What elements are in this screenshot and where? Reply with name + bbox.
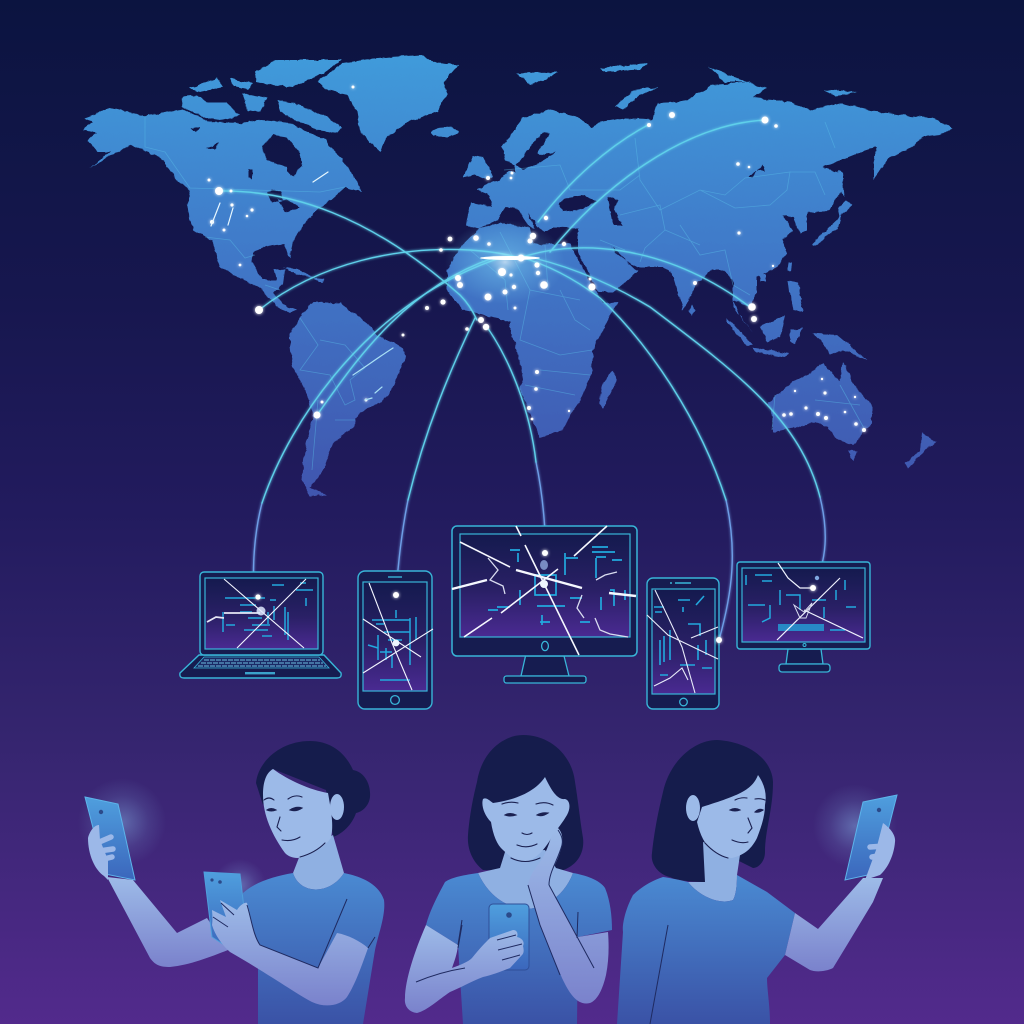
held phone — [489, 904, 529, 970]
phone glow — [78, 778, 166, 866]
monitor impact point — [540, 580, 548, 588]
neck and chest — [478, 850, 573, 909]
monitor frame — [737, 562, 870, 649]
ear — [686, 795, 700, 821]
monitor base — [779, 664, 830, 672]
monitor pale node — [540, 560, 548, 570]
phone screen cracks — [363, 583, 433, 690]
monitor secondary node — [815, 576, 819, 580]
monitor screen cracks — [460, 526, 607, 655]
Arctic islands — [182, 60, 342, 153]
right phone — [845, 795, 897, 880]
laptop wiggly line — [207, 613, 260, 622]
laptop base — [180, 655, 341, 678]
hand on right phone — [865, 823, 895, 880]
monitor thick cracks — [452, 570, 636, 596]
hand and arm outlines — [416, 925, 522, 982]
center phone — [204, 872, 245, 950]
phone impact point — [393, 640, 399, 646]
neck — [688, 842, 740, 901]
face — [263, 769, 332, 858]
person: woman looking at phone — [617, 740, 897, 1024]
device: central monitor — [452, 526, 637, 683]
Australia — [768, 362, 872, 445]
shirt — [240, 873, 384, 1024]
center phone cameras — [210, 878, 222, 884]
Africa — [447, 223, 618, 437]
monitor screen — [742, 568, 865, 642]
laptop screen — [205, 578, 318, 649]
monitor node — [542, 550, 548, 556]
Tasmania and New Zealand — [848, 432, 935, 468]
facial features — [502, 802, 553, 862]
monitor screen data marks — [746, 575, 856, 630]
ear — [330, 794, 344, 820]
phone home button — [680, 698, 687, 706]
phone speaker — [388, 576, 402, 578]
back hair — [468, 735, 583, 872]
face — [697, 775, 766, 858]
person: woman with two phones — [78, 741, 384, 1024]
Pacific and Asian islands — [689, 170, 867, 360]
neck — [293, 835, 344, 890]
monitor stand — [786, 649, 823, 664]
land masses — [83, 55, 952, 497]
phone screen cracks — [647, 590, 718, 693]
facial features — [264, 796, 325, 857]
center phone glow — [214, 859, 266, 911]
monitor data block — [778, 624, 824, 631]
monitor node — [810, 585, 816, 591]
laptop keyboard — [194, 657, 329, 668]
monitor wiggly lines — [488, 558, 628, 637]
monitor heart shaped line — [794, 603, 812, 618]
device: laptop — [180, 572, 341, 678]
phone screen data marks — [654, 596, 712, 675]
left arm and hand — [405, 925, 524, 1013]
arcs to devices — [253, 462, 825, 640]
phone glow — [813, 784, 897, 868]
face — [482, 777, 569, 862]
phone speaker — [670, 582, 691, 584]
person: woman with hand on cheek — [405, 735, 612, 1024]
laptop trackpad — [245, 672, 275, 674]
devices row — [180, 526, 870, 709]
United Kingdom and Ireland — [463, 155, 493, 180]
phone body — [358, 571, 432, 709]
world map — [83, 55, 952, 640]
laptop lid — [200, 572, 323, 655]
device: right monitor — [737, 562, 870, 672]
Madagascar — [599, 370, 617, 408]
country borders — [145, 116, 865, 470]
monitor screen data marks — [488, 547, 625, 625]
Arctic Eurasian islands — [517, 63, 858, 110]
connection arcs — [219, 120, 825, 640]
monitor power button — [542, 641, 548, 651]
forearm and hand — [212, 900, 368, 1005]
Eurasia — [466, 82, 952, 333]
hair and bun — [256, 741, 370, 837]
raised arm — [107, 877, 228, 967]
Cuba and Hispaniola — [283, 267, 325, 283]
laptop screen cracks — [224, 579, 306, 648]
left phone — [85, 797, 135, 880]
laptop node — [255, 594, 261, 600]
monitor stand — [521, 656, 569, 676]
arcs across the map — [219, 120, 820, 503]
central glow over Europe and North Africa — [445, 220, 565, 304]
laptop screen data marks — [223, 583, 313, 640]
shirt — [426, 873, 612, 1024]
monitor screen — [460, 534, 630, 637]
North America — [83, 108, 362, 313]
arm line — [650, 925, 668, 1024]
left phone camera — [99, 810, 103, 814]
city lights — [208, 86, 866, 432]
raised arm — [785, 878, 883, 971]
hand on left phone — [88, 825, 113, 880]
bright horizontal streak — [480, 256, 540, 260]
laptop impact point — [256, 606, 266, 616]
monitor frame — [452, 526, 637, 656]
arm outline — [213, 899, 375, 968]
phone screen data marks — [368, 610, 416, 680]
phone body — [647, 578, 719, 709]
Iceland — [432, 127, 458, 137]
right arm on cheek — [528, 828, 609, 1003]
device: phone right — [647, 578, 722, 709]
light streaks on land — [211, 172, 393, 400]
facial features — [705, 798, 765, 858]
Greenland — [317, 55, 458, 152]
phone node — [393, 592, 399, 598]
people row — [78, 735, 897, 1024]
held phone camera — [506, 912, 512, 918]
South America — [290, 302, 405, 497]
phone node — [716, 637, 722, 643]
monitor power button — [803, 644, 806, 646]
device: phone left — [358, 571, 433, 709]
monitor base — [504, 676, 586, 683]
phone home button — [391, 696, 399, 704]
arm outlines — [458, 830, 594, 975]
phone screen — [363, 582, 427, 691]
hair — [652, 740, 773, 882]
shirt — [617, 875, 795, 1024]
monitor screen cracks — [777, 563, 863, 640]
right phone camera — [877, 808, 881, 812]
phone screen — [652, 589, 715, 694]
